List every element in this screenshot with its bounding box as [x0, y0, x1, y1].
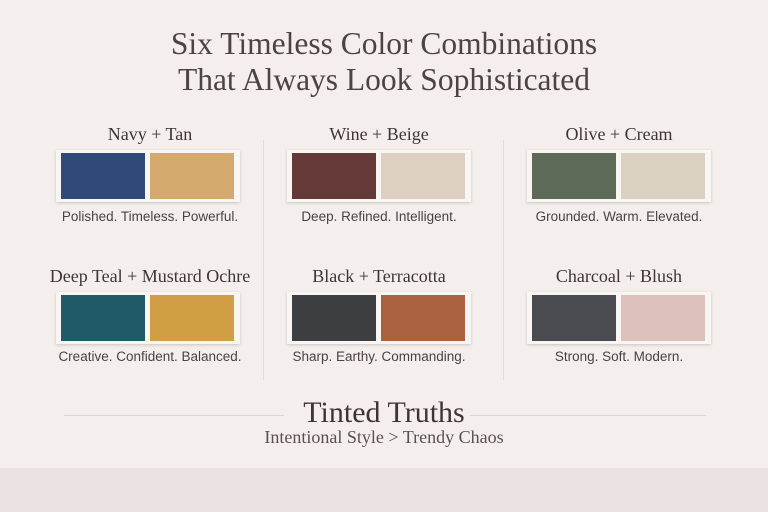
- panel: navy tan: [54, 124, 242, 224]
- panel: teal mustard: Creative. Confident. Balanced.: [58, 349, 242, 364]
- panel: charcoal blush: [526, 266, 712, 364]
- panel: teal mustard: [50, 266, 250, 364]
- footer brand: [64, 396, 706, 447]
- panel: olive cream: [526, 124, 712, 224]
- title: Six Timeless Color Combinations: [171, 26, 597, 61]
- panel: black terracotta: Black + Terracotta: [312, 266, 446, 286]
- panel: olive cream: Grounded. Warm. Elevated.: [536, 209, 702, 224]
- panel: wine beige: Wine + Beige: [329, 124, 429, 144]
- divider lines: [263, 140, 264, 380]
- panel: navy tan: Navy + Tan: [108, 124, 192, 144]
- panel: teal mustard: Deep Teal + Mustard Ochre: [50, 266, 250, 286]
- bottom band: [0, 468, 768, 512]
- panel: black terracotta: [286, 266, 472, 364]
- panel: charcoal blush: Strong. Soft. Modern.: [555, 349, 683, 364]
- panel: charcoal blush: Charcoal + Blush: [556, 266, 682, 286]
- panel: wine beige: Deep. Refined. Intelligent.: [301, 209, 457, 224]
- footer brand: Tinted Truths: [303, 396, 465, 429]
- panel: olive cream: Olive + Cream: [565, 124, 673, 144]
- panel: black terracotta: Sharp. Earthy. Commanding.: [292, 349, 466, 364]
- title: [171, 26, 597, 97]
- title: That Always Look Sophisticated: [178, 62, 590, 97]
- panel: navy tan: Polished. Timeless. Powerful.: [62, 209, 238, 224]
- footer brand: Intentional Style > Trendy Chaos: [264, 427, 504, 447]
- panel: wine beige: [286, 124, 472, 224]
